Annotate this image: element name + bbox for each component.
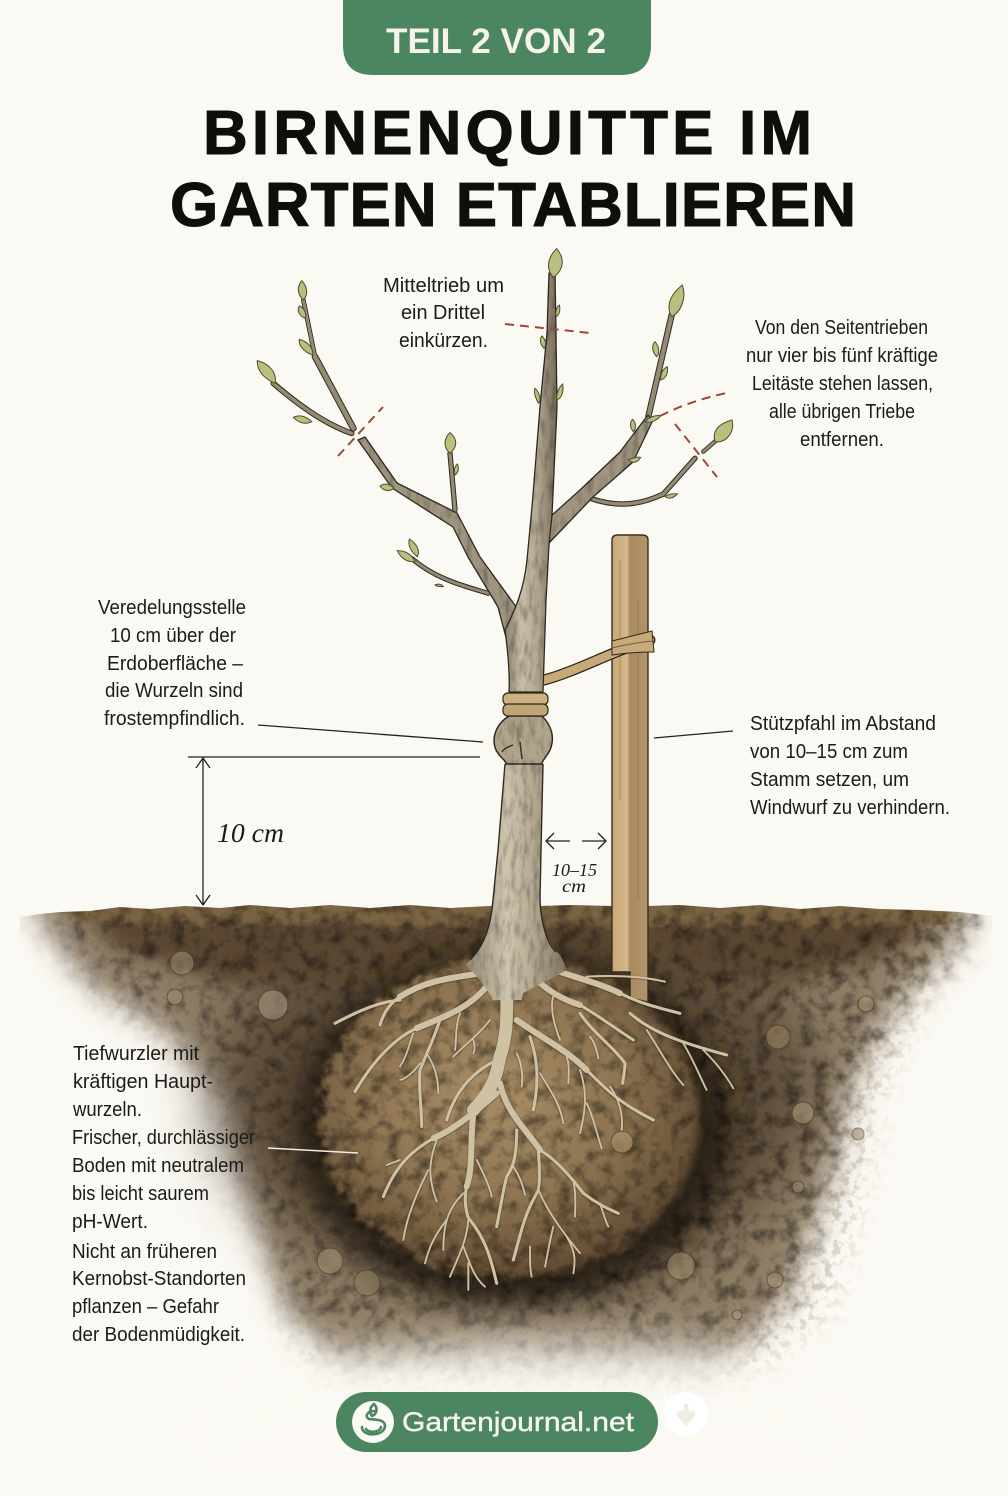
callout: central leader xyxy=(383,275,504,352)
callout: stake: von 10–15 cm zum xyxy=(750,741,908,763)
callout: side shoots: nur vier bis fünf kräftige xyxy=(746,345,938,367)
icon: save button xyxy=(664,1392,708,1436)
support stake xyxy=(612,535,648,1002)
callout: soil: wurzeln. xyxy=(72,1099,142,1121)
callout: central leader: ein Drittel xyxy=(401,302,485,324)
leader line: soil xyxy=(268,1148,358,1153)
callout: stake: Stamm setzen, um xyxy=(750,769,909,791)
leader line: stake xyxy=(654,731,733,738)
secondary roots xyxy=(335,976,727,1283)
callout: graft union: Erdoberfläche – xyxy=(107,653,244,675)
soil body xyxy=(25,895,985,1368)
rope wrap around trunk xyxy=(503,693,548,716)
dimension: 10 cm height: 10 cm xyxy=(217,818,284,848)
callout: soil: Boden mit neutralem xyxy=(72,1155,244,1177)
callout: soil: pH-Wert. xyxy=(72,1211,148,1233)
header tab: TEIL 2 VON 2 xyxy=(386,22,606,61)
left main limb xyxy=(358,437,525,650)
callout: soil xyxy=(72,1043,255,1346)
callout: side shoots: entfernen. xyxy=(800,429,884,451)
dimension: 10–15 cm distance: cm xyxy=(562,876,586,896)
callout: stake: Stützpfahl im Abstand xyxy=(750,713,936,735)
header tab xyxy=(343,0,651,75)
trunk outlines and knots xyxy=(470,742,556,960)
rope tie xyxy=(544,631,654,680)
callout: central leader: einkürzen. xyxy=(399,330,488,352)
buds xyxy=(257,249,733,587)
soil bottom fade xyxy=(200,1336,850,1440)
central leader and upper trunk xyxy=(505,273,557,692)
icon: sprout logo xyxy=(352,1401,394,1443)
lower trunk and root crown xyxy=(466,764,567,1060)
callout: graft union xyxy=(98,597,246,730)
callout: side shoots xyxy=(746,317,938,451)
callout: stake xyxy=(750,713,950,819)
callout: soil: Frischer, durchlässiger xyxy=(72,1127,255,1149)
callout: soil: pflanzen – Gefahr xyxy=(72,1296,219,1318)
root system xyxy=(335,963,733,1290)
callout: stake: Windwurf zu verhindern. xyxy=(750,797,950,819)
graft union xyxy=(494,716,552,764)
callout: soil: Nicht an früheren xyxy=(72,1241,217,1263)
callout: soil: Tiefwurzler mit xyxy=(73,1043,199,1065)
callout: side shoots: Leitäste stehen lassen, xyxy=(752,373,933,395)
callout: soil: bis leicht saurem xyxy=(72,1183,209,1205)
soil speckle halo xyxy=(70,930,965,1385)
footer badge xyxy=(336,1392,658,1452)
title: GARTEN ETABLIEREN xyxy=(170,171,856,240)
callout: graft union: frostempfindlich. xyxy=(104,708,245,730)
fine twigs xyxy=(273,300,717,593)
callout: central leader: Mitteltrieb um xyxy=(383,275,504,297)
footer badge: Gartenjournal.net xyxy=(402,1407,635,1437)
primary roots xyxy=(400,963,620,1187)
dimension: 10 cm height xyxy=(188,757,480,905)
tree trunk and main limbs xyxy=(358,273,653,1060)
cut marks xyxy=(338,324,727,477)
fine rootlets xyxy=(387,997,733,1290)
title xyxy=(170,99,856,240)
callout: graft union: Veredelungsstelle xyxy=(98,597,246,619)
title: BIRNENQUITTE IM xyxy=(203,99,812,168)
callout: soil: Kernobst-Standorten xyxy=(72,1268,246,1290)
callout: side shoots: Von den Seitentrieben xyxy=(755,317,928,339)
dimension: 10–15 cm distance xyxy=(546,833,606,896)
callout: graft union: 10 cm über der xyxy=(110,625,236,647)
dimension: 10–15 cm distance: 10–15 xyxy=(552,860,597,880)
soil stones xyxy=(167,951,874,1320)
callout: soil: kräftigen Haupt- xyxy=(73,1071,213,1093)
leader line: graft union xyxy=(258,725,483,742)
callout: side shoots: alle übrigen Triebe xyxy=(769,401,915,423)
soil cross-section xyxy=(25,895,985,1440)
callout: graft union: die Wurzeln sind xyxy=(105,680,243,702)
callout: soil: der Bodenmüdigkeit. xyxy=(72,1324,245,1346)
right main limb xyxy=(549,415,653,543)
